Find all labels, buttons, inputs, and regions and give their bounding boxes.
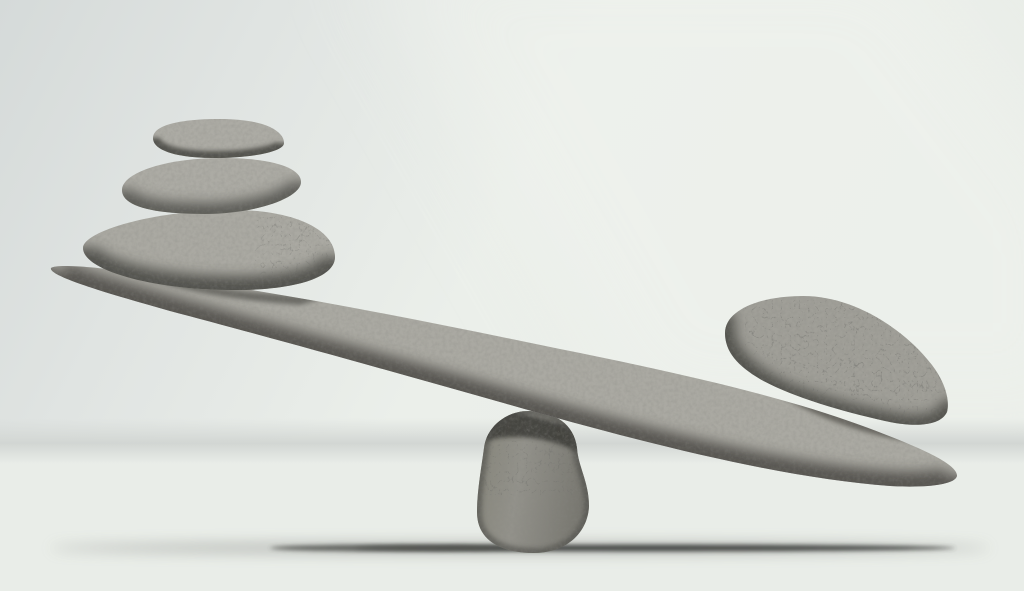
floor	[0, 464, 1024, 591]
plank underside shading	[51, 268, 957, 487]
cracks on fulcrum	[482, 425, 577, 495]
stone surface grain	[94, 126, 940, 528]
boulder contact shadow on plank	[786, 402, 908, 444]
rim shading	[477, 411, 589, 553]
stack contact shadow on plank	[158, 284, 319, 307]
cracks on boulder	[745, 300, 950, 415]
horizon band	[0, 418, 1024, 464]
seesaw plank	[51, 266, 957, 487]
contact shadow under plank	[485, 412, 578, 452]
background light streak	[360, 0, 1024, 430]
stacked stones: middle	[122, 158, 301, 214]
right boulder	[723, 296, 949, 427]
stacked stones: bottom	[83, 210, 335, 290]
ground shadow	[50, 543, 990, 553]
fulcrum stone	[477, 402, 589, 553]
cracks on bottom stone	[255, 215, 332, 274]
stacked stones: top	[153, 119, 284, 158]
